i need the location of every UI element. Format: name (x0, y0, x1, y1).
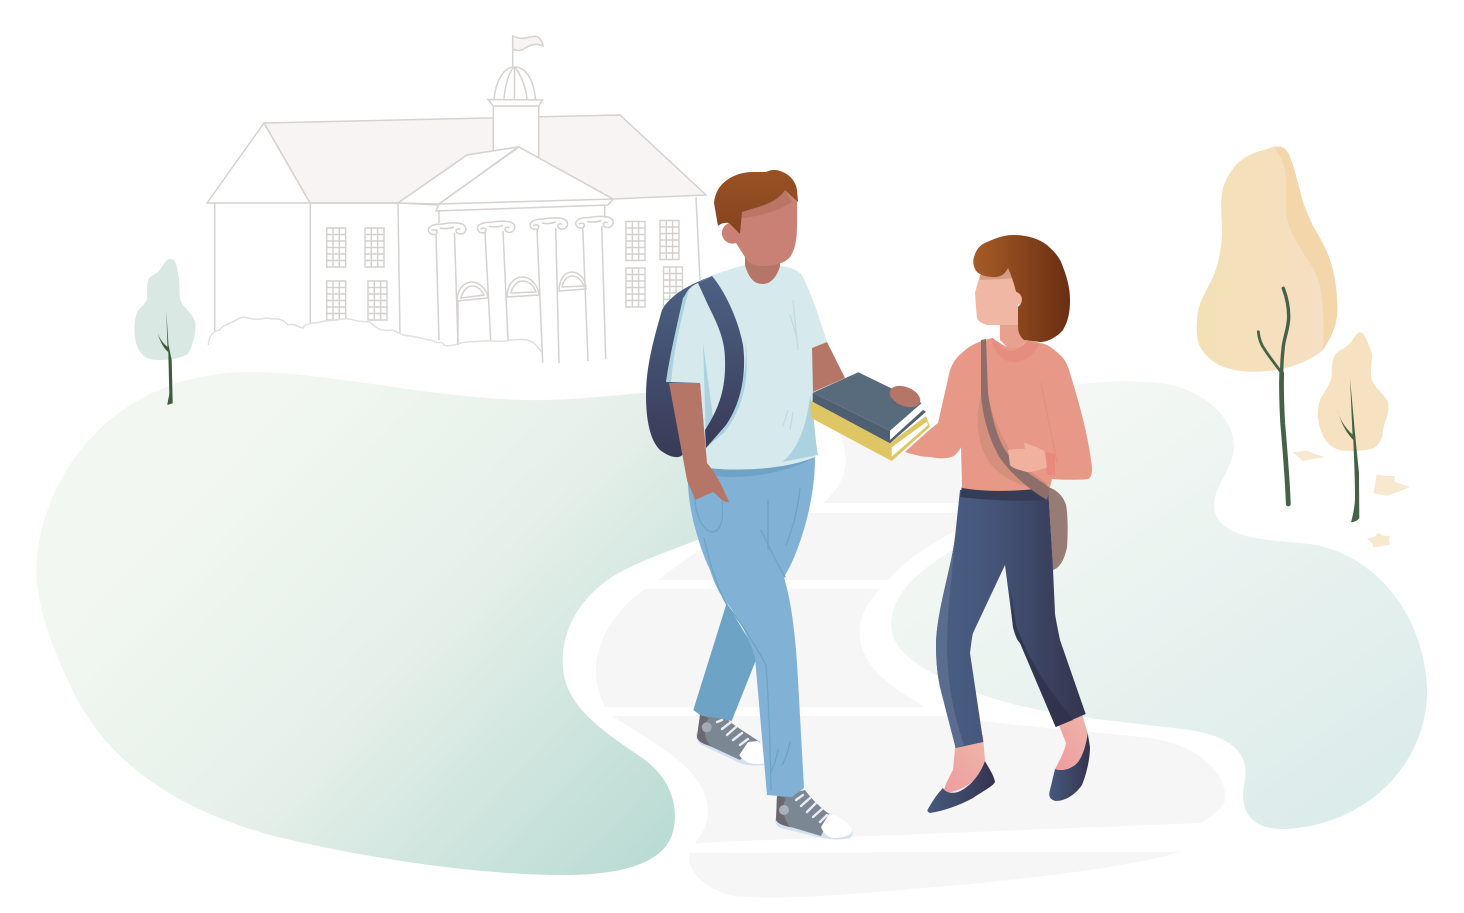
tower and cupola (488, 36, 543, 158)
front shoe (775, 790, 853, 840)
yellow book pages (892, 422, 928, 457)
neck (745, 250, 780, 284)
woman right shoe (1049, 733, 1090, 801)
woman left shoe (927, 761, 995, 813)
roof (264, 115, 706, 203)
shoulder strap (981, 339, 1050, 500)
left tree (134, 259, 196, 405)
man shirt (666, 265, 827, 470)
pediment (398, 147, 613, 211)
tree trunk (1258, 288, 1289, 504)
man pants (688, 457, 815, 797)
waistband (960, 486, 1048, 501)
tree trunk (158, 311, 173, 405)
woman sweater (905, 338, 1092, 491)
left gable and walls (207, 123, 700, 336)
background blob: right green hill (891, 381, 1427, 829)
shirt shading (666, 290, 818, 462)
campus path (596, 430, 1225, 898)
woman hair (973, 235, 1070, 342)
windows (327, 220, 682, 320)
top book side (813, 393, 890, 443)
background blob: left green hill (36, 372, 720, 875)
tree foliage (134, 259, 196, 360)
arched doors (457, 272, 586, 345)
shrubs (208, 317, 542, 362)
man hair (714, 170, 798, 234)
top book cover (813, 372, 922, 431)
woman face (975, 268, 1018, 325)
man face (722, 185, 797, 266)
ear (1015, 289, 1032, 306)
tree shade (1273, 147, 1337, 351)
collar (992, 338, 1039, 363)
pages (890, 403, 923, 440)
woman hand (1008, 443, 1047, 472)
bag (1048, 487, 1068, 570)
yellow book (810, 400, 930, 461)
backpack (646, 276, 720, 457)
forehead shadow (980, 268, 1012, 280)
man pants back leg (693, 603, 758, 721)
building: college hall line drawing (207, 36, 706, 363)
back shoe (696, 715, 764, 766)
columns (428, 216, 613, 363)
woman pants (936, 486, 1086, 748)
books (810, 372, 930, 461)
right small tree (1318, 332, 1389, 522)
forehead shadow (741, 190, 792, 218)
tree foliage (1197, 147, 1337, 372)
woman left leg (943, 735, 985, 793)
tree trunk (1337, 378, 1359, 522)
man (646, 170, 853, 839)
man hand on book (887, 382, 923, 411)
man left arm (669, 383, 729, 502)
strap shadow on sweater (978, 390, 1048, 489)
right large tree (1197, 147, 1337, 504)
backpack strap (698, 276, 744, 448)
woman right leg (1055, 708, 1088, 770)
sweater fold (1041, 383, 1057, 462)
neck (1000, 320, 1028, 350)
tree foliage (1318, 332, 1389, 451)
fallen leaves (1293, 451, 1410, 547)
man right arm (812, 342, 845, 392)
woman (905, 235, 1092, 813)
cuff (1045, 452, 1055, 475)
